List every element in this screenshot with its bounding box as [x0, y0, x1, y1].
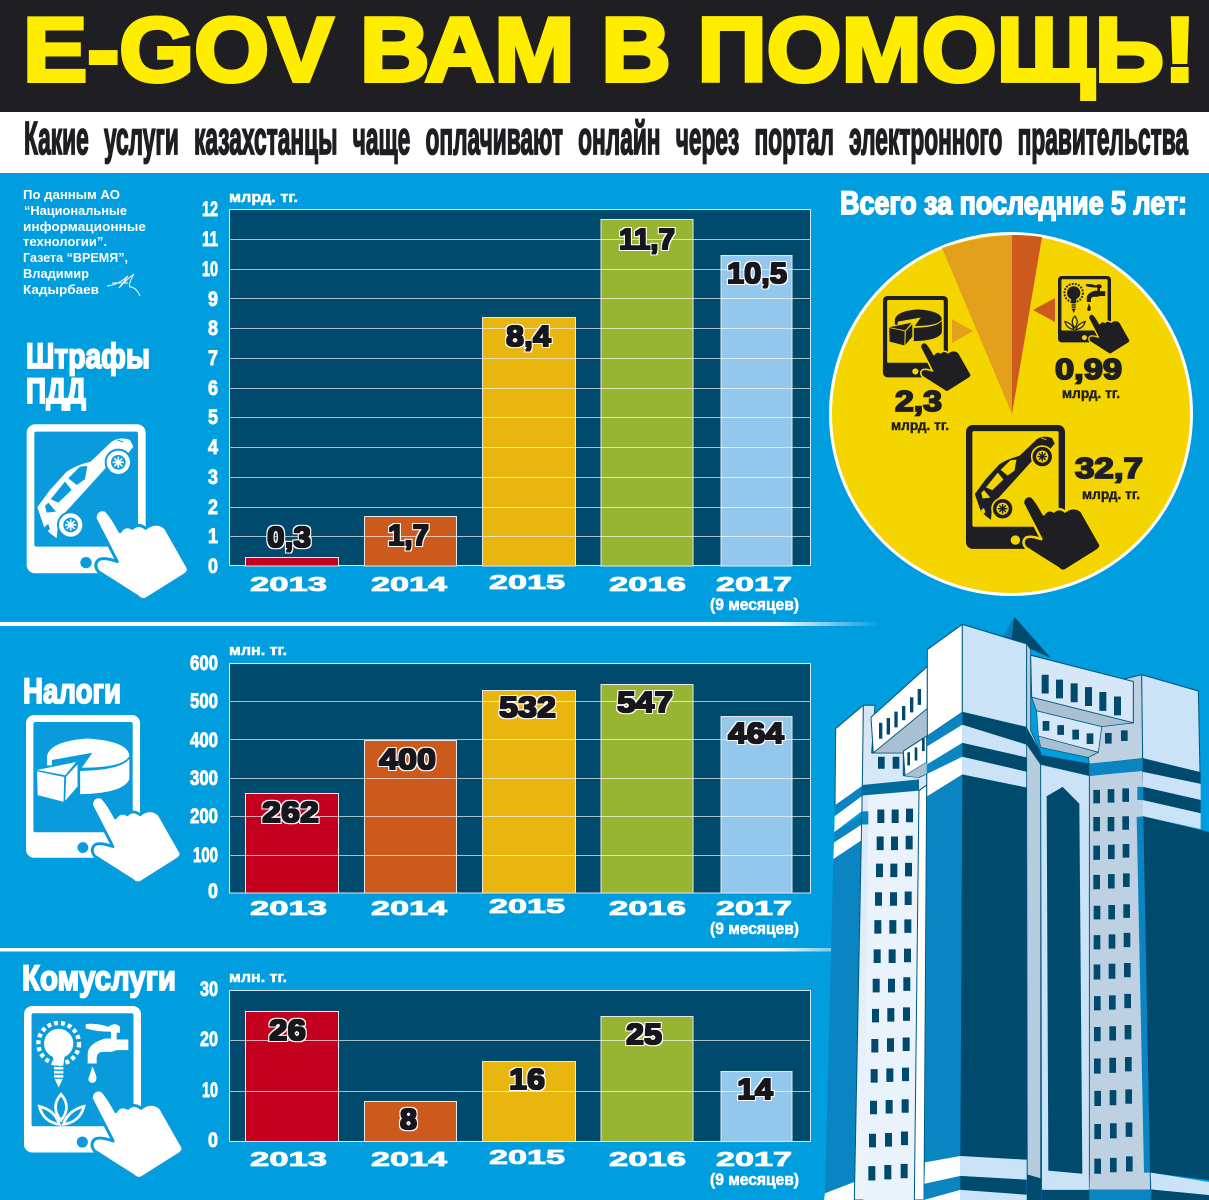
source note: технологии”. — [23, 235, 107, 249]
building windows — [1042, 675, 1133, 1174]
source note: информационные — [23, 220, 146, 234]
chart: traffic fines: (9 месяцев) — [710, 595, 799, 614]
chart: taxes: 464 — [728, 718, 784, 750]
heading: utilities: Комуслуги — [22, 959, 176, 998]
chart: taxes: 547 — [617, 687, 673, 719]
pointer: taxes — [952, 319, 973, 343]
chart: utilities: 2017 — [716, 1149, 792, 1171]
heading: traffic fines — [26, 337, 150, 411]
chart: utilities: млн. тг. — [229, 969, 287, 986]
chart: traffic fines: 0,3 — [267, 522, 311, 554]
chart: utilities: (9 месяцев) — [710, 1170, 799, 1189]
chart: traffic fines: 11 — [202, 228, 218, 251]
value: fines — [1075, 453, 1143, 502]
chart: traffic fines: 2017 — [716, 574, 792, 596]
chart: utilities: 16 — [509, 1064, 545, 1096]
heading: traffic fines: Штрафы — [26, 337, 150, 376]
source note — [23, 188, 146, 297]
chart: traffic fines: 9 — [208, 288, 218, 311]
chart: traffic fines: 8 — [208, 317, 218, 340]
chart: traffic fines: млрд. тг. — [229, 189, 298, 206]
chart: taxes: 400 — [190, 729, 218, 752]
divider — [0, 948, 880, 952]
icon: tablet with utilities — [1058, 276, 1130, 354]
chart: traffic fines: 10,5 — [727, 258, 787, 290]
chart: utilities: 2016 — [609, 1149, 686, 1171]
pointer: utilities — [1033, 298, 1055, 322]
source note: Кадырбаев — [23, 283, 99, 297]
value: utilities — [1055, 354, 1122, 401]
chart: taxes: (9 месяцев) — [710, 919, 799, 938]
chart: traffic fines: 11,7 — [619, 224, 675, 256]
chart: utilities: 2014 — [371, 1149, 448, 1171]
building illustration — [824, 617, 1209, 1200]
icon: tablet with pie — [883, 296, 971, 392]
chart: traffic fines: 6 — [208, 377, 218, 400]
chart: traffic fines: 5 — [208, 406, 218, 429]
chart: utilities: 26 — [269, 1015, 306, 1047]
chart: traffic fines: 10 — [202, 258, 218, 281]
chart: traffic fines: 2 — [208, 496, 218, 519]
chart: traffic fines: 8,4 — [506, 321, 551, 353]
chart: taxes: 300 — [190, 767, 218, 790]
chart: utilities: 2013 — [250, 1149, 327, 1171]
chart: taxes — [190, 642, 810, 938]
chart: traffic fines: 2015 — [489, 572, 565, 594]
chart: traffic fines: 2016 — [609, 574, 686, 596]
chart: traffic fines: 12 — [202, 198, 218, 221]
chart: utilities: 10 — [202, 1079, 218, 1102]
chart: utilities: 0 — [208, 1129, 218, 1152]
chart: utilities: 2015 — [489, 1147, 565, 1169]
value: taxes — [891, 386, 949, 433]
title: E-GOV ВАМ В ПОМОЩЬ! — [23, 0, 1196, 101]
chart: utilities: 20 — [200, 1028, 218, 1051]
icon: tablet with utilities — [24, 1006, 183, 1178]
chart: taxes: 2017 — [716, 898, 792, 920]
chart: taxes: млн. тг. — [229, 642, 287, 659]
chart: traffic fines — [202, 189, 810, 614]
chart: utilities: 8 — [400, 1104, 417, 1136]
chart: taxes: 2016 — [609, 898, 686, 920]
chart: taxes: 2014 — [371, 898, 448, 920]
icon: tablet with pie — [26, 715, 181, 883]
chart: traffic fines: 2013 — [250, 574, 327, 596]
chart: traffic fines: 1 — [208, 525, 218, 548]
chart: traffic fines: 3 — [208, 466, 218, 489]
chart: traffic fines: 7 — [208, 347, 218, 370]
value: utilities: млрд. тг. — [1062, 385, 1120, 401]
chart: taxes: 2013 — [250, 898, 327, 920]
value: taxes: 2,3 — [895, 386, 942, 418]
chart: taxes: 2015 — [489, 896, 565, 918]
source note: “Национальные — [24, 204, 127, 218]
chart: taxes: 0 — [208, 880, 218, 903]
chart: taxes: 500 — [190, 690, 218, 713]
chart: utilities: 14 — [737, 1074, 773, 1106]
divider — [0, 622, 880, 626]
building windows — [868, 689, 925, 1180]
source note: По данным АО — [23, 188, 120, 202]
chart: taxes: 400 — [379, 744, 436, 776]
chart: taxes: 532 — [499, 692, 556, 724]
source note: Владимир — [23, 267, 89, 281]
slice: taxes — [942, 235, 1012, 414]
chart: taxes: 262 — [262, 797, 319, 829]
subtitle band — [0, 112, 1209, 173]
chart: utilities: 30 — [200, 978, 218, 1001]
chart: traffic fines: 0 — [208, 555, 218, 578]
header band — [0, 0, 1209, 112]
heading: taxes: Налоги — [23, 672, 121, 711]
chart: utilities — [200, 969, 810, 1189]
chart: taxes: 200 — [190, 805, 218, 828]
chart: utilities: 25 — [626, 1019, 662, 1051]
value: fines: млрд. тг. — [1082, 486, 1140, 502]
value: taxes: млрд. тг. — [891, 417, 949, 433]
icon: tablet with car — [966, 425, 1101, 571]
chart: traffic fines: 1,7 — [388, 520, 429, 552]
slice: utilities — [1012, 235, 1042, 414]
chart: traffic fines: 4 — [208, 436, 218, 459]
source note: Газета “ВРЕМЯ”, — [23, 251, 128, 265]
value: utilities: 0,99 — [1055, 354, 1122, 386]
chart: traffic fines: 2014 — [371, 574, 448, 596]
pie chart — [830, 234, 1192, 594]
value: fines: 32,7 — [1075, 453, 1143, 485]
chart: taxes: 600 — [190, 652, 218, 675]
icon: tablet with car — [27, 424, 188, 600]
heading: traffic fines: ПДД — [26, 372, 86, 411]
chart: taxes: 100 — [193, 844, 218, 867]
